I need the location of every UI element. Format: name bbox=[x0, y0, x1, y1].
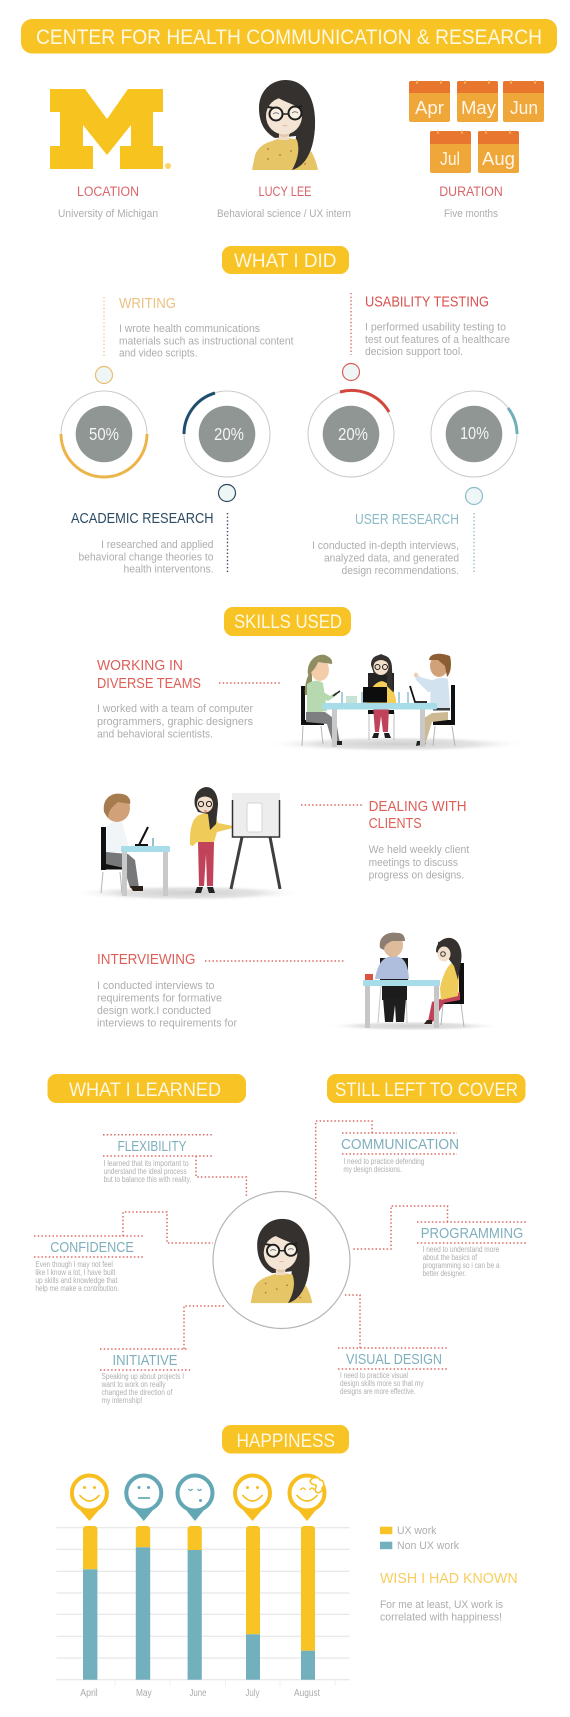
right man and chair bbox=[410, 654, 455, 746]
donut: 50 percent writing bbox=[61, 391, 147, 477]
block: academic research: ACADEMIC RESEARCH bbox=[71, 510, 214, 527]
text: interviewing bbox=[97, 951, 345, 1030]
text: interviewing: interviews to requirements for bbox=[97, 1018, 237, 1030]
lesson: visual design: I need to practice visual bbox=[340, 1371, 408, 1380]
lesson: flexibility: but to balance this with reality. bbox=[104, 1175, 191, 1184]
lesson: programming: about the basics of bbox=[423, 1253, 478, 1262]
axis labels: July bbox=[246, 1688, 260, 1699]
heading: still left to cover bbox=[327, 1074, 526, 1103]
lesson: programming bbox=[353, 1206, 527, 1278]
left woman and chair bbox=[301, 655, 342, 746]
duration label bbox=[439, 184, 503, 220]
donut: 20 percent usability testing bbox=[308, 390, 394, 477]
lesson: flexibility: I learned that its important to bbox=[104, 1159, 189, 1168]
bar: July bbox=[246, 1526, 260, 1680]
icon: avatar bbox=[251, 1219, 312, 1303]
heading: happiness bbox=[222, 1425, 349, 1454]
donut: 50 percent writing: 50% bbox=[89, 424, 119, 444]
donut: 20 percent academic research: 20% bbox=[214, 424, 244, 444]
block: usability testing bbox=[342, 293, 510, 380]
calendar: Aug: Aug bbox=[482, 148, 515, 169]
bar: April bbox=[83, 1526, 97, 1680]
heading: what I did: WHAT I DID bbox=[234, 251, 336, 272]
illustration: team around a table bbox=[263, 654, 531, 752]
stacked bar chart bbox=[56, 1526, 350, 1699]
chart legend: UX work bbox=[397, 1525, 437, 1537]
axis labels: May bbox=[136, 1688, 152, 1699]
lesson: initiative: changed the direction of bbox=[102, 1388, 173, 1397]
mood marker: June sleepy bbox=[178, 1476, 212, 1521]
client seated at table bbox=[101, 794, 170, 896]
duration label: Five months bbox=[444, 208, 498, 220]
lesson: initiative: my internship! bbox=[102, 1396, 142, 1405]
illustration: client meeting with presentation board bbox=[70, 787, 306, 901]
lesson: initiative: Speaking up about projects I bbox=[102, 1372, 184, 1381]
text: interviewing: INTERVIEWING bbox=[97, 951, 196, 968]
text: interviewing: requirements for formative bbox=[97, 992, 222, 1004]
chart legend bbox=[380, 1525, 459, 1552]
axis labels: August bbox=[294, 1688, 320, 1699]
location label bbox=[58, 184, 158, 220]
axis labels: April bbox=[80, 1688, 98, 1699]
block: writing: WRITING bbox=[119, 295, 176, 312]
mood marker: August delighted bbox=[290, 1476, 324, 1521]
block: academic research: behavioral change theories to bbox=[78, 552, 214, 564]
lesson: communication: I need to practice defending bbox=[343, 1157, 424, 1166]
name label: Behavioral science / UX intern bbox=[217, 208, 351, 220]
location label: University of Michigan bbox=[58, 208, 158, 220]
block: usability testing: decision support tool. bbox=[365, 346, 463, 358]
mood marker: July happy bbox=[235, 1476, 270, 1521]
heading: skills used bbox=[224, 607, 351, 636]
heading: what I did bbox=[222, 246, 349, 274]
location label: LOCATION bbox=[77, 184, 139, 199]
middle woman and chair bbox=[363, 654, 396, 740]
lesson: flexibility: FLEXIBILITY bbox=[118, 1138, 186, 1155]
text: dealing with clients bbox=[301, 798, 469, 882]
axis labels: June bbox=[190, 1688, 207, 1699]
text: wish I had known: For me at least, UX work is bbox=[380, 1599, 503, 1611]
lesson: confidence: CONFIDENCE bbox=[50, 1239, 134, 1256]
icon: block M logo bbox=[50, 89, 171, 169]
text: working in diverse teams: DIVERSE TEAMS bbox=[97, 675, 201, 692]
lesson: initiative: INITIATIVE bbox=[112, 1352, 178, 1369]
lesson: programming: better designer. bbox=[423, 1269, 466, 1278]
bar: June bbox=[188, 1526, 202, 1680]
text: dealing with clients: We held weekly client bbox=[369, 844, 469, 856]
donut: 20 percent usability testing: 20% bbox=[338, 424, 368, 444]
lesson: confidence: Even though I may not feel bbox=[35, 1260, 113, 1269]
block: writing bbox=[96, 295, 294, 384]
icon: calendar months bbox=[409, 80, 544, 173]
text: working in diverse teams: WORKING IN bbox=[97, 657, 183, 674]
table bbox=[322, 692, 437, 747]
presentation board bbox=[231, 793, 280, 889]
block: academic research: health interventons. bbox=[124, 564, 214, 576]
heading: what I learned bbox=[48, 1074, 246, 1103]
block: academic research: I researched and applied bbox=[101, 539, 214, 551]
lesson: initiative bbox=[100, 1306, 224, 1405]
lesson: programming: I need to understand more bbox=[423, 1245, 499, 1254]
lesson: visual design: designs are more effective. bbox=[340, 1387, 416, 1396]
text: working in diverse teams bbox=[97, 657, 281, 740]
lesson: visual design bbox=[338, 1295, 448, 1396]
heading: still left to cover: STILL LEFT TO COVER bbox=[335, 1080, 518, 1101]
lesson: programming: PROGRAMMING bbox=[421, 1225, 523, 1242]
lesson: confidence: like I know a lot, I have built bbox=[35, 1268, 116, 1277]
lesson: communication: COMMUNICATION bbox=[341, 1136, 459, 1153]
lesson: confidence bbox=[34, 1212, 213, 1293]
illustration: interview at a table bbox=[324, 933, 504, 1031]
title banner bbox=[21, 19, 557, 54]
axis labels bbox=[80, 1688, 320, 1699]
calendar: May: May bbox=[461, 97, 497, 118]
icon: avatar of Lucy Lee bbox=[252, 80, 318, 170]
text: wish I had known bbox=[380, 1570, 518, 1624]
block: user research: analyzed data, and generated bbox=[324, 552, 459, 564]
center circle with avatar bbox=[213, 1192, 350, 1328]
text: dealing with clients: progress on designs. bbox=[369, 870, 464, 882]
mood marker: April happy bbox=[72, 1476, 107, 1521]
woman presenting bbox=[190, 787, 233, 893]
lesson: flexibility: understand the ideal process bbox=[104, 1167, 187, 1176]
lesson: visual design: design skills more so that my bbox=[340, 1379, 424, 1388]
interviewer and chair bbox=[424, 938, 464, 1027]
calendar: Apr: Apr bbox=[415, 97, 444, 118]
chart legend: Non UX work bbox=[397, 1540, 459, 1552]
name label bbox=[217, 184, 351, 220]
lesson: communication: my design decisions. bbox=[343, 1165, 402, 1174]
block: writing: materials such as instructional content bbox=[119, 335, 294, 347]
text: working in diverse teams: programmers, graphic designers bbox=[97, 716, 253, 728]
donut: 10 percent user research: 10% bbox=[460, 423, 489, 443]
block: usability testing: test out features of a healthcare bbox=[365, 334, 510, 346]
text: interviewing: I conducted interviews to bbox=[97, 980, 214, 992]
block: writing: I wrote health communications bbox=[119, 323, 260, 335]
table bbox=[363, 980, 440, 1028]
block: writing: and video scripts. bbox=[119, 348, 198, 360]
bar: August bbox=[301, 1526, 315, 1680]
lesson: confidence: up skills and knowledge that bbox=[35, 1276, 118, 1285]
donut: 10 percent user research bbox=[431, 391, 517, 477]
calendar: Jun: Jun bbox=[510, 97, 538, 118]
block: user research: USER RESEARCH bbox=[355, 511, 459, 528]
name label: LUCY LEE bbox=[258, 184, 312, 199]
text: wish I had known: correlated with happiness! bbox=[380, 1612, 502, 1624]
lesson: communication bbox=[316, 1121, 459, 1200]
mood marker: May neutral bbox=[126, 1476, 161, 1521]
heading: what I learned: WHAT I LEARNED bbox=[69, 1080, 221, 1101]
calendar: Jul: Jul bbox=[440, 148, 460, 169]
bar: May bbox=[136, 1526, 150, 1680]
lesson: flexibility bbox=[103, 1135, 246, 1197]
block: usability testing: USABILITY TESTING bbox=[365, 294, 489, 311]
block: user research: I conducted in-depth interviews, bbox=[312, 540, 459, 552]
heading: happiness: HAPPINESS bbox=[236, 1431, 335, 1452]
text: dealing with clients: CLIENTS bbox=[369, 815, 422, 832]
text: interviewing: design work.I conducted bbox=[97, 1005, 211, 1017]
block: user research: design recommendations. bbox=[342, 565, 459, 577]
man being interviewed bbox=[365, 933, 409, 1023]
text: wish I had known: WISH I HAD KNOWN bbox=[380, 1570, 518, 1587]
text: dealing with clients: meetings to discuss bbox=[369, 857, 458, 869]
block: user research bbox=[312, 488, 482, 577]
lesson: confidence: help me make a contribution. bbox=[35, 1284, 119, 1293]
heading: skills used: SKILLS USED bbox=[234, 612, 342, 633]
lesson: initiative: want to work on really bbox=[101, 1380, 166, 1389]
duration label: DURATION bbox=[439, 184, 503, 199]
donut: 20 percent academic research bbox=[184, 391, 270, 477]
text: working in diverse teams: and behavioral scientists. bbox=[97, 728, 213, 740]
block: academic research bbox=[71, 484, 236, 576]
text: dealing with clients: DEALING WITH bbox=[369, 798, 467, 815]
lesson: programming: programming so i can be a bbox=[423, 1261, 500, 1270]
lesson: visual design: VISUAL DESIGN bbox=[346, 1351, 442, 1368]
text: working in diverse teams: I worked with a team of computer bbox=[97, 703, 253, 715]
block: usability testing: I performed usability testing to bbox=[365, 322, 506, 334]
